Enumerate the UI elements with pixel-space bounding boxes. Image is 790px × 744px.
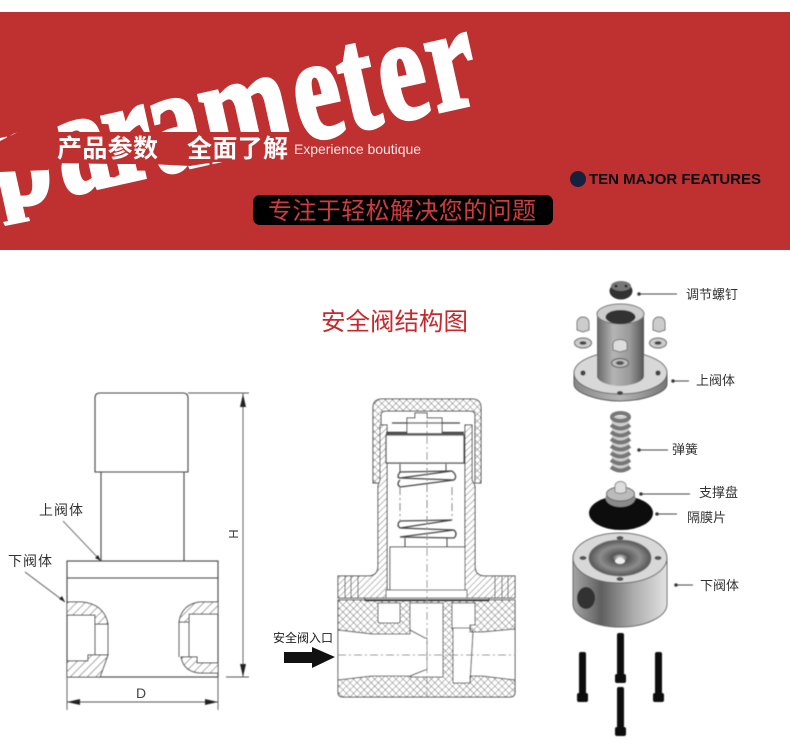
label: upper body: 上阀体 xyxy=(39,502,83,518)
cap xyxy=(373,399,481,483)
label: support disc: 支撑盘 xyxy=(699,485,738,500)
part: adjusting screw xyxy=(610,281,632,300)
bore xyxy=(338,603,443,680)
heading: product parameters: 产品参数 xyxy=(57,134,158,163)
internal parts xyxy=(338,413,515,697)
label: valve inlet: 安全阀入口 xyxy=(273,630,333,645)
heading: comprehensive: 全面了解 xyxy=(187,135,288,163)
part: support disc xyxy=(606,482,636,507)
part: spring xyxy=(611,413,630,472)
part: lower valve body xyxy=(573,533,667,627)
part: nuts and washers xyxy=(574,317,666,348)
label: spring: 弹簧 xyxy=(672,442,698,457)
icon: navy dot xyxy=(570,171,586,187)
panel: red header banner xyxy=(0,0,790,250)
diagram: exploded view xyxy=(573,281,693,736)
dimension label H: H xyxy=(226,529,241,539)
diagram: valve cross section xyxy=(338,399,515,697)
label: diaphragm: 隔膜片 xyxy=(687,510,726,525)
title: safety valve structure: 安全阀结构图 xyxy=(321,308,468,336)
label: adjusting screw: 调节螺钉 xyxy=(686,287,738,302)
part: bolts xyxy=(577,633,664,736)
label: lower valve body: 下阀体 xyxy=(700,578,739,593)
label: ten major features: TEN MAJOR FEATURES xyxy=(589,171,761,188)
tagline pill: 专注于轻松解决您的问题 xyxy=(268,198,536,225)
dimension label D: D xyxy=(136,685,146,701)
label: lower body: 下阀体 xyxy=(8,553,52,569)
arrow: inlet direction xyxy=(284,647,335,668)
part: upper valve body xyxy=(574,304,667,401)
label: upper valve body: 上阀体 xyxy=(696,373,735,388)
neck and flange xyxy=(338,425,387,598)
diagram: outer dimensions drawing xyxy=(25,393,249,710)
part: diaphragm xyxy=(589,496,653,530)
lower body xyxy=(338,600,515,697)
leader arrows xyxy=(638,293,693,586)
subheading: Experience boutique: Experience boutique xyxy=(294,141,421,157)
